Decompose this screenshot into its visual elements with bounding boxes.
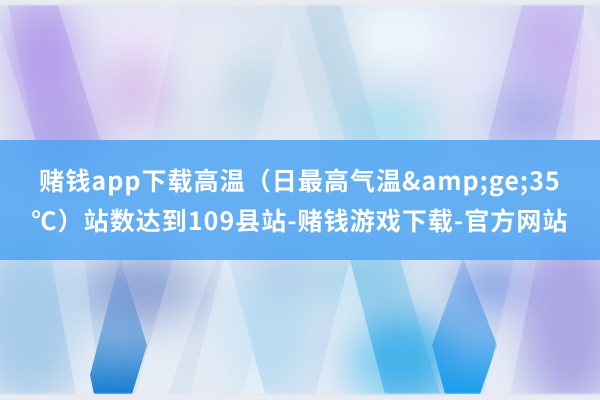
lower left dark diamond [90, 258, 147, 394]
pale triangle left edge [0, 30, 35, 140]
banner band [0, 140, 600, 260]
lower small triangle [243, 355, 266, 394]
lower white triangle [190, 250, 265, 394]
lower band slanted [135, 200, 236, 394]
pale strip far right [572, 5, 600, 140]
pale wedge top left [58, 5, 180, 140]
teal band top centre [305, 5, 378, 140]
title: 赌钱app下载高温（日最高气温&amp;ge;35 [39, 162, 561, 198]
lower centre triangle [315, 260, 385, 394]
lower right light band [484, 220, 545, 394]
title [32, 162, 568, 238]
title: ℃）站数达到109县站-赌钱游戏下载-官方网站 [32, 202, 568, 238]
lower right dark diamond [432, 258, 497, 394]
top and bottom pale edges [0, 0, 600, 5]
lower blue band [350, 260, 440, 394]
lower left light band [40, 200, 100, 394]
purple band top left [8, 5, 100, 140]
purple band top right [488, 5, 585, 140]
pale triangle top centre [255, 25, 320, 140]
